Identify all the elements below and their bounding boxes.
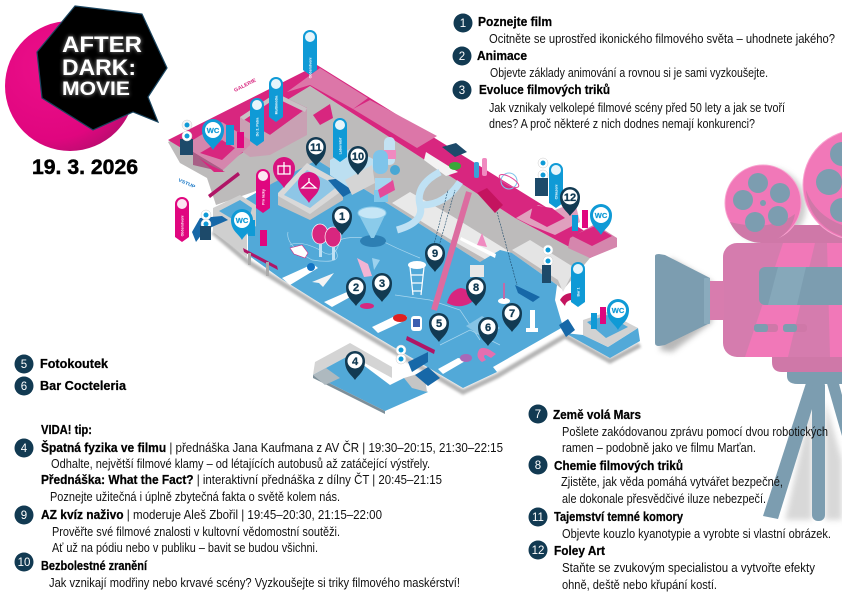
pins: numbered map markers: 7 bbox=[509, 308, 515, 320]
pins: WC: WC bbox=[236, 216, 249, 225]
text block: programme 4, 9, 10: Poznejte užitečná i úplně zbytečná fakta o světě kolem nás. bbox=[50, 490, 340, 504]
pins: numbered map markers: 6 bbox=[485, 322, 491, 334]
text block: programme 1-3: Objevte základy animování a rovnou si je sami vyzkoušejte. bbox=[490, 66, 768, 80]
dark cable bbox=[430, 190, 517, 285]
floor paths bbox=[288, 232, 500, 345]
text block: programme 7, 8, 11, 12 bbox=[528, 404, 831, 592]
text block: programme 4, 9, 10: Přednáška: What the Fact? | interaktivní přednáška z dílny ČT | 20:45–21:15 bbox=[41, 472, 442, 487]
sign plates bbox=[282, 264, 318, 285]
floor edge shadow bbox=[213, 232, 640, 392]
text block: programme 1-3: 3 bbox=[459, 85, 465, 97]
text block: programme 4, 9, 10: VIDA! tip: bbox=[41, 422, 92, 437]
text block: programme 5-6 bbox=[14, 354, 127, 396]
pins: numbered map markers: 9 bbox=[432, 248, 438, 260]
text block: programme 1-3: Animace bbox=[477, 48, 527, 63]
pins: numbered map markers bbox=[306, 137, 580, 380]
room near 11 bbox=[278, 163, 343, 218]
tags: vertical location signs: Občerstvení bbox=[180, 215, 184, 236]
logo: After Dark Movie: MOVIE bbox=[62, 79, 130, 100]
boat bbox=[290, 245, 308, 258]
text block: programme 7, 8, 11, 12: Zjistěte, jak věda pomáhá vytvářet bezpečné, bbox=[561, 475, 783, 489]
pink pole bbox=[434, 192, 469, 310]
bobbin bbox=[411, 316, 422, 331]
room 4 bbox=[313, 343, 392, 378]
swirl tube bbox=[397, 172, 460, 230]
text block: programme 7, 8, 11, 12: 8 bbox=[535, 460, 541, 472]
text block: programme 7, 8, 11, 12: Chemie filmových triků bbox=[554, 458, 683, 473]
text block: programme 7, 8, 11, 12: Foley Art bbox=[554, 543, 606, 558]
right wing room bbox=[583, 312, 638, 347]
gallery label: GALERIE bbox=[233, 77, 258, 94]
grey ground band under gallery bbox=[168, 86, 590, 290]
tags: vertical location signs: Chlazení bbox=[554, 184, 558, 199]
text block: programme 7, 8, 11, 12: Země volá Mars bbox=[553, 407, 641, 422]
text block: programme 4, 9, 10: 4 bbox=[21, 443, 28, 455]
logo: After Dark Movie: AFTER bbox=[62, 32, 142, 57]
cog bbox=[560, 293, 572, 306]
pins: gift and wardrobe bbox=[273, 157, 320, 203]
tags: vertical location signs: Občerstvení bbox=[308, 57, 312, 78]
main blue floor bbox=[235, 160, 563, 388]
gallery rooms bbox=[240, 93, 307, 135]
rocket bbox=[373, 137, 400, 202]
ant bbox=[360, 303, 374, 309]
butterfly bbox=[357, 258, 372, 277]
text block: programme 1-3: 2 bbox=[459, 51, 465, 63]
right wing floor bbox=[565, 328, 640, 358]
dome bbox=[447, 288, 472, 306]
small figures bbox=[474, 162, 479, 178]
text block: programme 7, 8, 11, 12: ale dokonale přesvědčivé iluze nebezpečí. bbox=[562, 492, 766, 506]
pins: numbered map markers: 12 bbox=[564, 192, 576, 204]
left WC room bbox=[213, 195, 256, 257]
text block: programme 1-3: Poznejte film bbox=[478, 14, 552, 29]
pins: numbered map markers: 1 bbox=[339, 211, 345, 223]
pins: numbered map markers: 5 bbox=[436, 318, 442, 330]
magnet bbox=[478, 348, 496, 362]
text block: programme 4, 9, 10: Odhalte, největší filmové klamy – od létajících autobusů až zatáčející výstřely. bbox=[51, 457, 430, 471]
text block: programme 7, 8, 11, 12: ramen – podobně jako ve filmu Marťan. bbox=[562, 441, 756, 455]
text block: programme 1-3 bbox=[452, 14, 835, 131]
text block: programme 4, 9, 10: Prověřte své filmové znalosti v kultovní vědomostní soutěži. bbox=[52, 525, 340, 539]
text block: programme 4, 9, 10: Ať už na pódiu nebo v publiku – bavit se budou všichni. bbox=[52, 541, 318, 555]
logo: After Dark Movie: MOVIE bbox=[62, 79, 130, 100]
text block: programme 5-6: 5 bbox=[21, 359, 27, 371]
tags: vertical location signs: Bar 1 bbox=[576, 288, 580, 296]
text block: programme 7, 8, 11, 12: Staňte se zvukovým specialistou a vytvořte efekty bbox=[562, 561, 816, 575]
tags: vertical location signs: Laboratoř bbox=[338, 137, 342, 154]
entrance label: VSTUP bbox=[178, 177, 196, 189]
hanging arc bbox=[477, 188, 503, 213]
pins: numbered map markers: 8 bbox=[473, 282, 479, 294]
date: 19. 3. 2026 bbox=[32, 156, 138, 179]
restroom signs bbox=[226, 125, 234, 145]
text block: programme 4, 9, 10: Bezbolestné zranění bbox=[41, 558, 147, 573]
hammock bbox=[515, 285, 540, 302]
tags: vertical location signs: Do 2. Patra bbox=[256, 117, 260, 136]
dark blue stairs room 11 bbox=[328, 178, 352, 197]
paper plane bbox=[312, 273, 334, 287]
tags: vertical location signs: Pro lázky bbox=[262, 189, 266, 205]
balloons bbox=[312, 224, 341, 260]
dna bbox=[498, 298, 510, 304]
pins: numbered map markers: 11 bbox=[310, 142, 322, 154]
text block: programme 1-3: 1 bbox=[460, 18, 466, 30]
gates bbox=[243, 248, 278, 270]
pins: numbered map markers: 10 bbox=[352, 151, 364, 163]
logo: After Dark Movie: AFTER bbox=[62, 32, 142, 57]
text block: programme 4, 9, 10: 9 bbox=[21, 510, 27, 522]
map: building floor plan bbox=[168, 65, 640, 414]
logo: After Dark Movie: DARK: bbox=[62, 55, 136, 80]
gallery pink deck bbox=[168, 65, 612, 258]
pins: numbered map markers: 4 bbox=[352, 356, 359, 368]
medical box bbox=[470, 265, 484, 277]
gallery stage bbox=[424, 152, 458, 176]
tornado bbox=[358, 207, 386, 247]
text block: programme 4, 9, 10: Špatná fyzika ve filmu | přednáška Jana Kaufmana z AV ČR | 19:30–20:15, 21:30–22:15 bbox=[41, 440, 503, 455]
text block: programme 4, 9, 10: AZ kvíz naživo | moderuje Aleš Zbořil | 19:45–20:30, 21:15–22:00 bbox=[41, 507, 382, 522]
text block: programme 5-6: Bar Cocteleria bbox=[40, 378, 127, 393]
warning sign stand bbox=[460, 237, 496, 258]
pins: numbered map markers: 3 bbox=[379, 278, 385, 290]
text block: programme 4, 9, 10: Jak vznikají modřiny nebo krvavé scény? Vyzkoušejte si triky filmového maskérství! bbox=[49, 576, 460, 590]
text block: programme 4, 9, 10: 10 bbox=[18, 557, 30, 569]
text block: programme 7, 8, 11, 12: Tajemství temné komory bbox=[554, 509, 684, 524]
tags: vertical location signs: Multimédia bbox=[274, 95, 278, 114]
text block: programme 1-3: Evoluce filmových triků bbox=[479, 82, 610, 97]
text block: programme 5-6: Fotokoutek bbox=[40, 356, 109, 371]
pins: numbered map markers: 2 bbox=[353, 282, 359, 294]
logo: After Dark Movie: DARK: bbox=[62, 55, 136, 80]
pins: WC: WC bbox=[207, 126, 220, 135]
text block: programme 7, 8, 11, 12: ohně, deště nebo křupání kostí. bbox=[562, 578, 717, 592]
text block: programme 7, 8, 11, 12: 7 bbox=[535, 409, 541, 421]
pins: WC: WC bbox=[612, 306, 625, 315]
stairs bbox=[415, 367, 440, 386]
pins: WC bbox=[202, 119, 629, 330]
water tower bbox=[408, 261, 426, 295]
pins: WC: WC bbox=[595, 211, 608, 220]
tags: vertical location signs bbox=[175, 30, 585, 307]
logo: After Dark Movie bbox=[5, 6, 167, 151]
text block: programme 1-3: dnes? A proč některé z nich dodnes nemají konkurenci? bbox=[489, 117, 755, 131]
text block: programme 7, 8, 11, 12: 12 bbox=[532, 545, 544, 557]
text block: programme 5-6: 6 bbox=[21, 381, 27, 393]
text block: programme 4, 9, 10 bbox=[14, 422, 503, 590]
room near 10 bbox=[330, 148, 375, 190]
service icons bbox=[180, 139, 193, 155]
text block: programme 1-3: Jak vznikaly velkolepé filmové scény před 50 lety a jak se tvoří bbox=[489, 101, 785, 115]
illustration: film camera bbox=[655, 130, 842, 521]
text block: programme 7, 8, 11, 12: 11 bbox=[532, 512, 544, 524]
microscope bbox=[530, 310, 535, 328]
